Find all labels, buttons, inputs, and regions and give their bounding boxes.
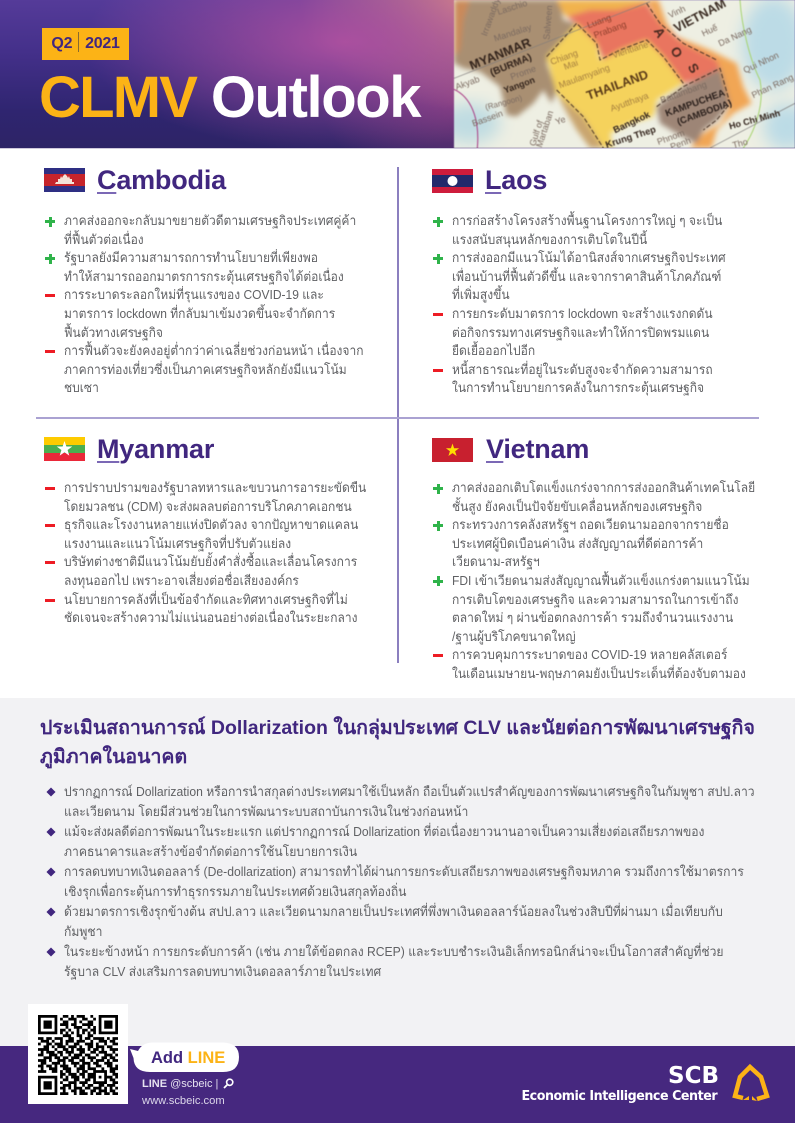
bullet point: เชิงรุกเพื่อกระตุ้นการทำธุรกรรมภายในประเทศด้วยเงินสกุลท้องถิ่น xyxy=(64,884,406,899)
negative point: ภาคการท่องเที่ยวซึ่งเป็นภาคเศรษฐกิจหลักยังมีแนวโน้ม xyxy=(64,362,347,377)
map of mainland southeast asia: Mai xyxy=(562,58,579,72)
negative point xyxy=(45,480,366,514)
bullet point: ปรากฏการณ์ Dollarization หรือการนำสกุลต่างประเทศมาใช้เป็นหลัก ถือเป็นตัวแปรสำคัญของการพัฒนาเศรษฐกิจในกัมพูชา สปป.ลาว xyxy=(64,784,755,799)
negative point: ธุรกิจและโรงงานหลายแห่งปิดตัวลง จากปัญหาขาดแคลน xyxy=(64,517,358,532)
heading: cambodia: Cambodia xyxy=(97,165,226,195)
panel: cambodia xyxy=(44,165,364,395)
positive point: ตลาดใหม่ ๆ ผ่านข้อตกลงการค้า รวมถึงจำนวนแรงงาน xyxy=(452,610,733,625)
icon: qr code xyxy=(28,1004,128,1104)
contact: line account: LINE @scbeic | xyxy=(142,1078,218,1090)
map of mainland southeast asia xyxy=(453,0,795,148)
period badge xyxy=(42,28,129,60)
pros and cons list: laos xyxy=(433,211,726,396)
map of mainland southeast asia: S xyxy=(685,61,702,76)
map of mainland southeast asia: THAILAND xyxy=(585,68,650,103)
negative point: การควบคุมการระบาดของ COVID-19 หลายคลัสเตอร์ xyxy=(452,647,727,662)
negative point: หนี้สาธารณะที่อยู่ในระดับสูงจะจำกัดความสามารถ xyxy=(452,362,713,377)
heading: dollarization: ภูมิภาคในอนาคต xyxy=(40,746,187,768)
map of mainland southeast asia: Vinh xyxy=(667,4,687,20)
map of mainland southeast asia: Prome xyxy=(509,63,537,82)
map of mainland southeast asia: KAMPUCHEA xyxy=(664,88,727,119)
negative point: ชัดเจนจะสร้างความไม่แน่นอนอย่างต่อเนื่องในระยะกลาง xyxy=(64,610,357,625)
negative point: บริษัทต่างชาติมีแนวโน้มยับยั้งคำสั่งซื้อและเลื่อนโครงการ xyxy=(64,554,357,569)
positive point: /ฐานผู้บริโภคขนาดใหญ่ xyxy=(452,629,576,644)
positive point: ภาคส่งออกจะกลับมาขยายตัวดีตามเศรษฐกิจประเทศคู่ค้า xyxy=(64,213,356,228)
map of mainland southeast asia: A xyxy=(651,25,669,41)
pros and cons list: vietnam xyxy=(433,480,755,681)
map of mainland southeast asia: Ho Chi Minh xyxy=(728,108,781,131)
positive point: การก่อสร้างโครงสร้างพื้นฐานโครงการใหญ่ ๆ จะเป็น xyxy=(452,213,722,228)
positive point xyxy=(433,480,755,514)
logo text: scb eic: SCB xyxy=(668,1063,719,1089)
negative point: มาตรการ lockdown ที่กลับมาเข้มงวดขึ้นจะจำกัดการ xyxy=(64,306,335,321)
bullet point: และเวียดนาม โดยมีส่วนช่วยในการพัฒนาระบบสถาบันการเงินในช่วงก่อนหน้า xyxy=(64,804,468,819)
positive point: ภาคส่งออกเติบโตแข็งแกร่งจากการส่งออกสินค้าเทคโนโลยี xyxy=(452,480,755,495)
map of mainland southeast asia: Da Nang xyxy=(717,24,753,48)
map of mainland southeast asia: Huế xyxy=(700,22,719,38)
positive point: ที่เพิ่มสูงขึ้น xyxy=(452,287,510,302)
positive point: รัฐบาลยังมีความสามารถการทำนโยบายที่เพียงพอ xyxy=(64,250,318,265)
icon: scb bell logo xyxy=(730,1063,772,1105)
positive point: เวียดนาม-สหรัฐฯ xyxy=(452,554,540,569)
negative point: ต่อกิจกรรมทางเศรษฐกิจและทำให้การปิดพรมแดน xyxy=(452,325,709,340)
heading: dollarization: ประเมินสถานการณ์ Dollarization ในกลุ่มประเทศ CLV และนัยต่อการพัฒนาเศรษฐกิจ xyxy=(40,717,755,739)
map of mainland southeast asia: Phnom xyxy=(656,128,686,147)
bullet point: แม้จะส่งผลดีต่อการพัฒนาในระยะแรก แต่ปรากฏการณ์ Dollarization ที่ต่อเนื่องยาวนานอาจเป็นความเสี่ยงต่อเสถียรภาพของ xyxy=(64,824,704,839)
icon: search xyxy=(223,1078,234,1089)
map of mainland southeast asia: Ayutthaya xyxy=(609,91,650,114)
negative point xyxy=(45,286,335,340)
negative point: ในการทำนโยบายการคลังในการกระตุ้นเศรษฐกิจ xyxy=(452,380,704,395)
negative point xyxy=(433,306,713,358)
map of mainland southeast asia: Chiang xyxy=(549,48,579,67)
footer band xyxy=(0,1046,795,1123)
panel: laos xyxy=(432,165,726,396)
negative point: การยกระดับมาตรการ lockdown จะสร้างแรงกดดัน xyxy=(452,306,713,321)
positive point: ชั้นสูง ยังคงเป็นปัจจัยขับเคลื่อนหลักของเศรษฐกิจ xyxy=(452,499,702,514)
bullet point xyxy=(40,942,780,982)
heading: myanmar: Myanmar xyxy=(97,434,214,464)
icon: vietnam flag xyxy=(432,438,473,462)
map of mainland southeast asia: Maulamyaing xyxy=(557,63,611,90)
positive point xyxy=(433,516,729,570)
cons list: myanmar xyxy=(45,480,366,625)
bullet point: กัมพูชา xyxy=(64,924,102,939)
bullet list: dollarization xyxy=(46,784,755,980)
map of mainland southeast asia: Bangkok xyxy=(612,109,652,135)
negative point xyxy=(45,341,364,395)
callout: add line speech bubble: Add LINE xyxy=(151,1049,225,1067)
negative point xyxy=(433,647,746,681)
negative point xyxy=(45,552,357,588)
icon: cambodia flag xyxy=(44,168,85,192)
bullet point: ภาคธนาคารและสร้างข้อจำกัดต่อการใช้นโยบายการเงิน xyxy=(64,844,357,859)
map of mainland southeast asia: Yangon xyxy=(502,75,536,95)
negative point: การฟื้นตัวจะยังคงอยู่ต่ำกว่าค่าเฉลี่ยช่วงก่อนหน้า เนื่องจาก xyxy=(64,343,364,358)
negative point: ชบเซา xyxy=(64,380,99,395)
callout: add line speech bubble xyxy=(128,1040,240,1073)
map of mainland southeast asia: (Rangoon) xyxy=(484,93,523,112)
bullet point xyxy=(46,822,704,859)
map of mainland southeast asia: Akyab xyxy=(454,74,481,92)
map of mainland southeast asia: Battambang xyxy=(659,79,708,105)
heading: dollarization xyxy=(40,716,755,768)
negative point: นโยบายการคลังที่เป็นข้อจำกัดและทิศทางเศรษฐกิจที่ไม่ xyxy=(64,592,348,607)
map of mainland southeast asia: Bassein xyxy=(471,108,504,129)
bullet point xyxy=(46,902,723,940)
negative point xyxy=(45,590,357,625)
bullet point: การลดบทบาทเงินดอลลาร์ (De-dollarization) สามารถทำได้ผ่านการยกระดับเสถียรภาพของเศรษฐกิจมหภาค รวมถึงการใช้มาตรการ xyxy=(64,864,744,879)
heading: vietnam: Vietnam xyxy=(486,434,589,464)
negative point: ยืดเยื้อออกไปอีก xyxy=(452,343,535,358)
map of mainland southeast asia: Qui Nhon xyxy=(742,50,780,75)
positive point: กระทรวงการคลังสหรัฐฯ ถอดเวียดนามออกจากรายชื่อ xyxy=(452,517,729,532)
positive point xyxy=(433,250,726,302)
positive point xyxy=(45,249,344,284)
map of mainland southeast asia: Prabang xyxy=(592,19,628,40)
map of mainland southeast asia: (BURMA) xyxy=(489,52,533,79)
icon: myanmar flag xyxy=(44,437,85,461)
map of mainland southeast asia: O xyxy=(667,44,686,60)
bullet point xyxy=(46,864,744,900)
map of mainland southeast asia: Mandalay xyxy=(493,22,533,44)
negative point: โดยมวลชน (CDM) จะส่งผลลบต่อการบริโภคภาคเอกชน xyxy=(64,499,352,514)
negative point: ลงทุนออกไป เพราะอาจเสี่ยงต่อชื่อเสียงองค์กร xyxy=(64,573,299,588)
negative point: แรงงานและแนวโน้มเศรษฐกิจที่ปรับตัวแย่ลง xyxy=(64,536,291,551)
bullet point: รัฐบาล CLV ส่งเสริมการลดบทบาทเงินดอลลาร์ภายในประเทศ xyxy=(64,964,381,979)
contact: line account xyxy=(142,1076,238,1092)
positive point: FDI เข้าเวียดนามส่งสัญญาณฟื้นตัวแข็งแกร่งตามแนวโน้ม xyxy=(452,573,750,588)
pros and cons list: cambodia xyxy=(45,213,364,395)
positive point: การเติบโตของเศรษฐกิจ และความสามารถในการเข้าถึง xyxy=(452,592,738,607)
bullet point: ด้วยมาตรการเชิงรุกข้างต้น สปป.ลาว และเวียดนามกลายเป็นประเทศที่พึ่งพาเงินดอลลาร์น้อยลงในช่วงสิบปีที่ผ่านมา เมื่อเทียบกับ xyxy=(64,904,723,919)
map of mainland southeast asia: Luang xyxy=(586,12,613,30)
map of mainland southeast asia: Gulf of xyxy=(527,119,545,147)
map of mainland southeast asia: Salween xyxy=(541,5,554,40)
negative point: การปราบปรามของรัฐบาลทหารและขบวนการอารยะขัดขืน xyxy=(64,480,366,495)
logo text: scb eic: Economic Intelligence Center xyxy=(521,1088,717,1104)
map of mainland southeast asia: Vientiane xyxy=(611,39,649,60)
map of mainland southeast asia: MYANMAR xyxy=(468,35,533,73)
negative point xyxy=(433,360,713,396)
title: CLMV Outlook xyxy=(39,65,420,130)
map of mainland southeast asia: Phan Rang xyxy=(750,72,795,100)
positive point xyxy=(433,211,722,248)
map of mainland southeast asia: Martaban xyxy=(534,109,555,148)
negative point: ฟื้นตัวทางเศรษฐกิจ xyxy=(64,325,163,340)
bullet point: ในระยะข้างหน้า การยกระดับการค้า (เช่น ภายใต้ข้อตกลง RCEP) และระบบชำระเงินอิเล็กทรอนิกส์น่าจะเป็นโอกาสสำคัญที่ช่วย xyxy=(64,944,724,959)
panel: vietnam xyxy=(432,434,755,681)
contact: website: www.scbeic.com xyxy=(142,1095,225,1107)
header banner xyxy=(0,0,795,149)
positive point xyxy=(433,571,750,644)
negative point: การระบาดระลอกใหม่ที่รุนแรงของ COVID-19 และ xyxy=(64,287,324,302)
period badge: Q2 2021 xyxy=(51,35,120,52)
negative point: ในเดือนเมษายน-พฤษภาคมยังเป็นประเด็นที่ต้องจับตามอง xyxy=(452,666,746,681)
heading: laos: Laos xyxy=(485,165,547,195)
positive point: ที่ฟื้นตัวต่อเนื่อง xyxy=(64,232,144,247)
negative point xyxy=(45,517,358,552)
positive point: แรงสนับสนุนหลักของการเติบโตในปีนี้ xyxy=(452,232,647,247)
bullet point xyxy=(46,784,755,819)
panel: myanmar xyxy=(44,434,366,625)
positive point xyxy=(45,213,356,247)
map of mainland southeast asia: (CAMBODIA) xyxy=(676,98,733,127)
icon: laos flag xyxy=(432,169,473,193)
map of mainland southeast asia: Ye xyxy=(554,114,567,127)
panel: dollarization assessment xyxy=(0,698,795,1046)
logo text: scb eic xyxy=(500,1060,719,1106)
positive point: การส่งออกมีแนวโน้มได้อานิสงส์จากเศรษฐกิจประเทศ xyxy=(452,250,726,265)
positive point: ประเทศผู้บิดเบือนค่าเงิน ส่งสัญญาณที่ดีต่อการค้า xyxy=(452,536,703,551)
positive point: ทำให้สามารถออกมาตรการกระตุ้นเศรษฐกิจได้ต่อเนื่อง xyxy=(64,269,344,284)
positive point: เพื่อนบ้านที่ฟื้นตัวดีขึ้น และจากราคาสินค้าโภคภัณฑ์ xyxy=(452,269,721,284)
